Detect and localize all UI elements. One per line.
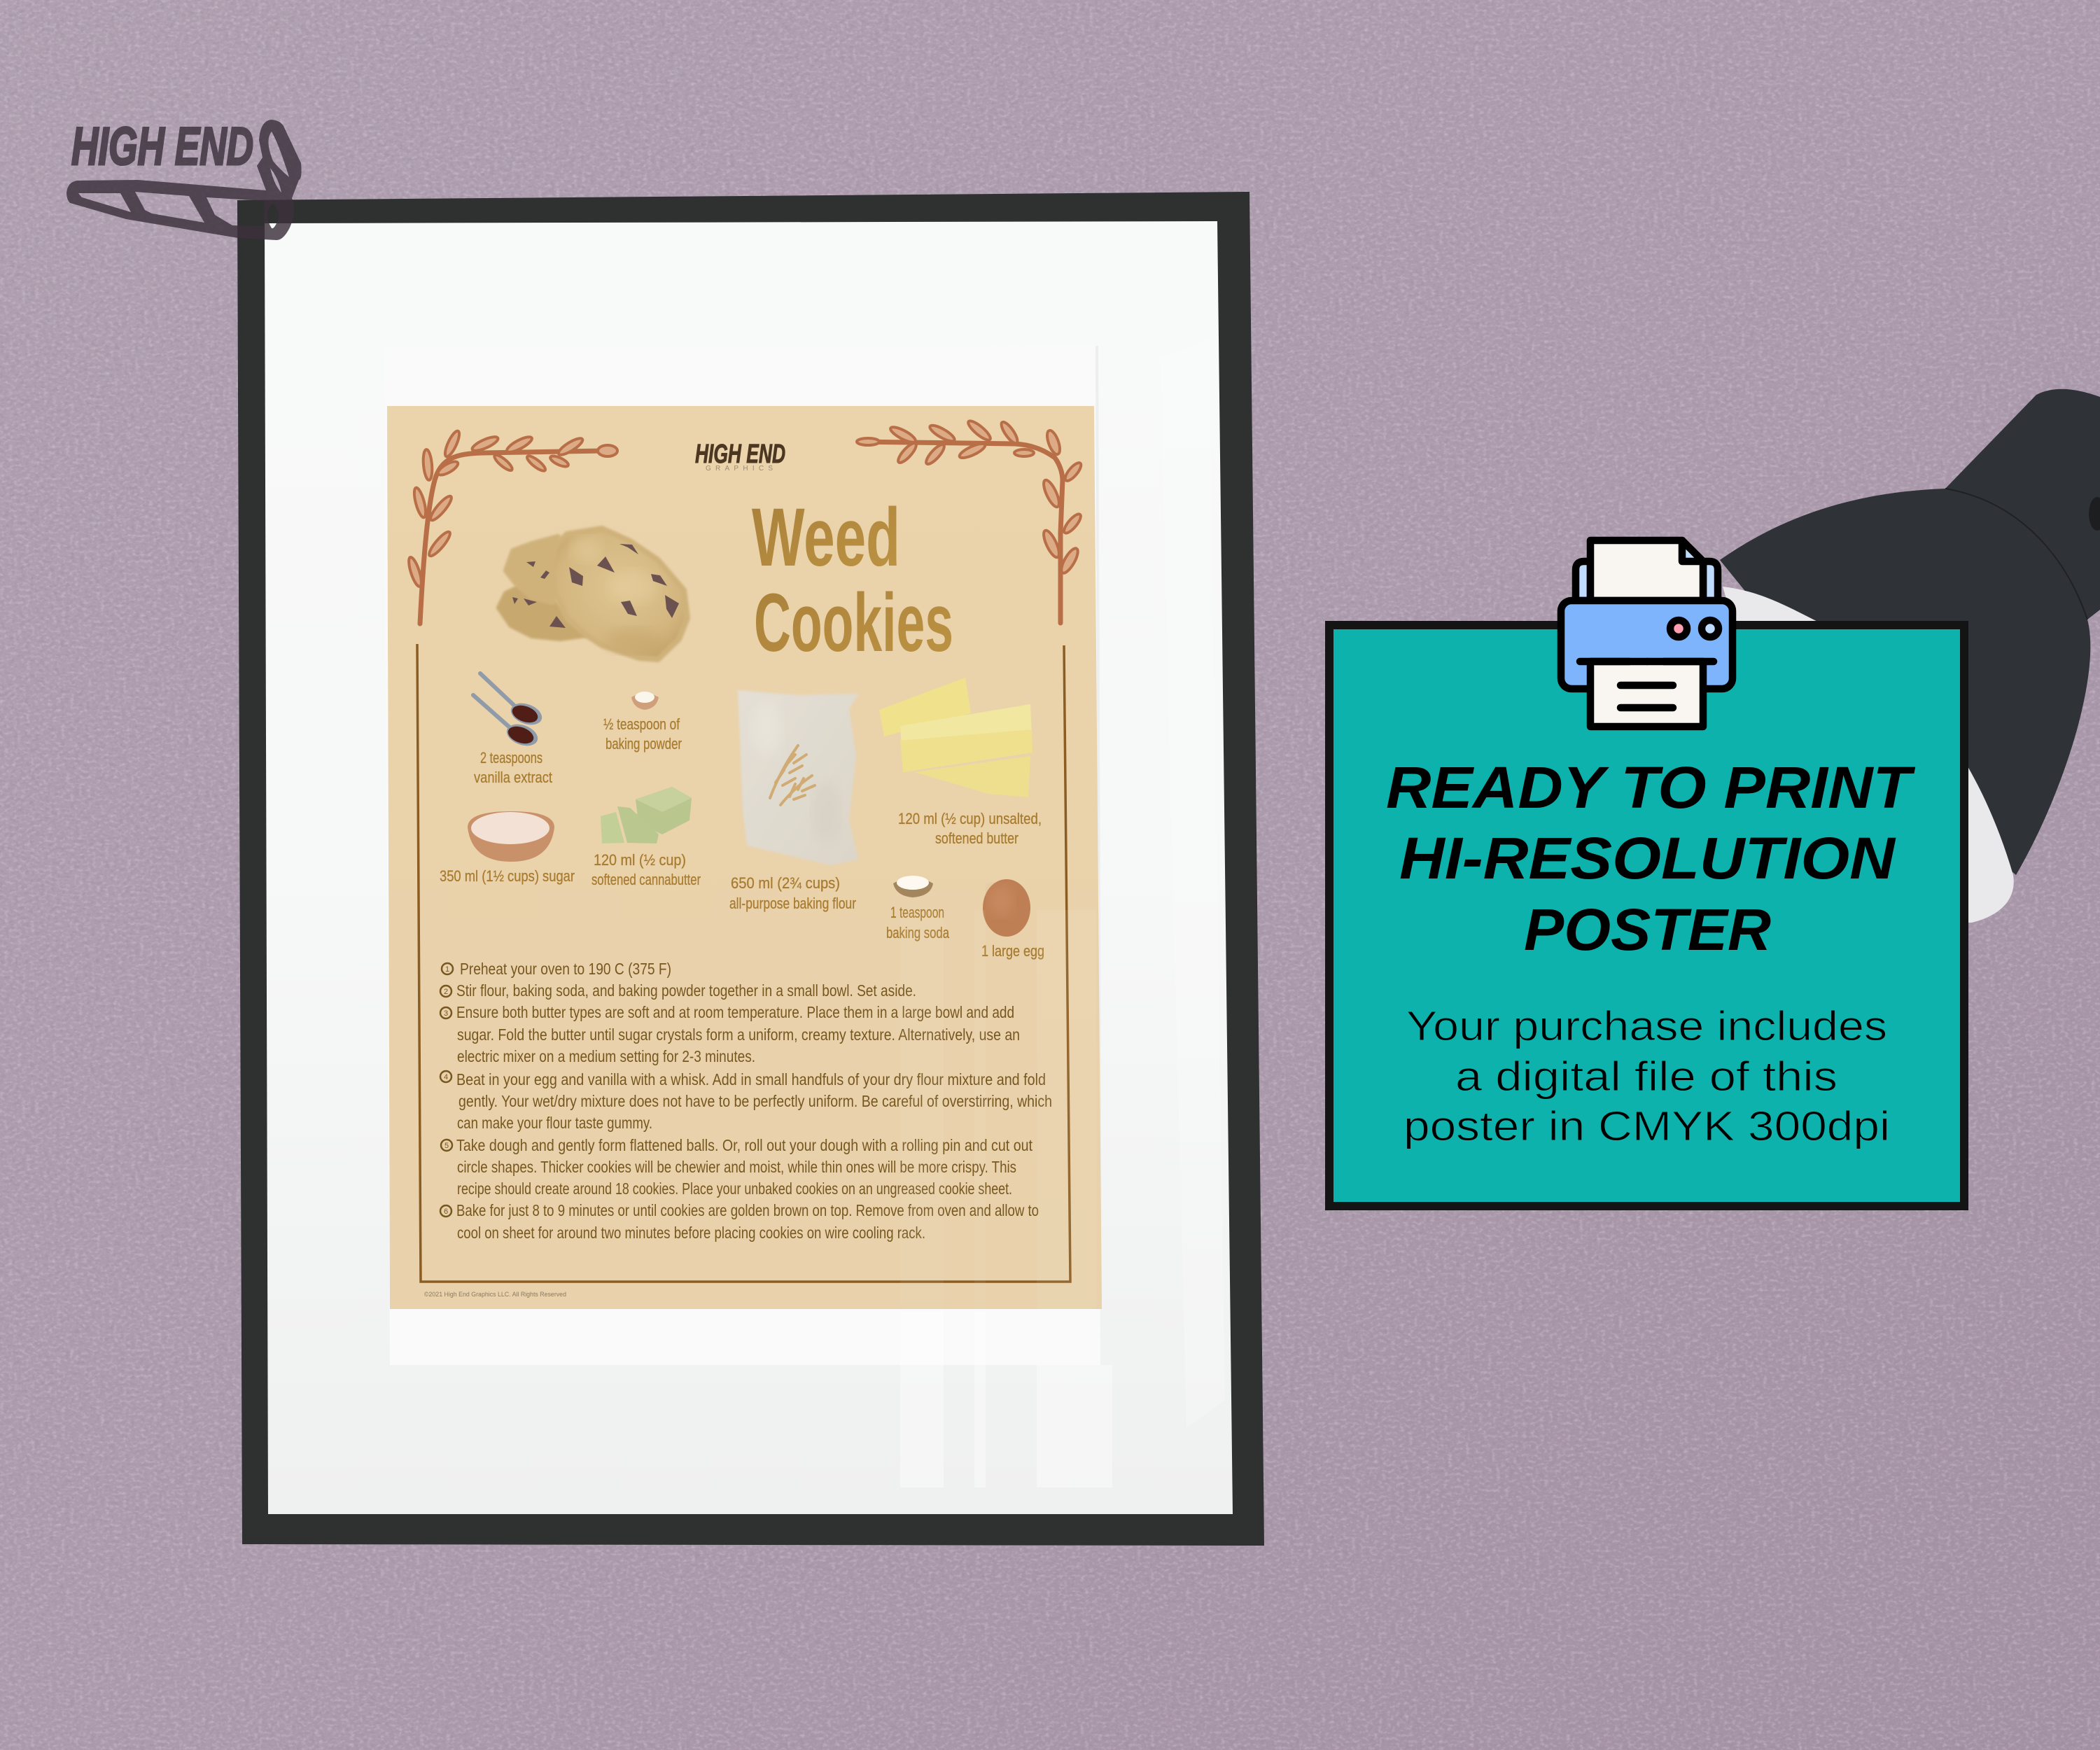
icon: printer (1561, 540, 1732, 727)
poster brand logo: HIGH END (695, 440, 785, 469)
ingredient: baking powder: ½ teaspoon of (603, 715, 680, 733)
glass reflections (900, 339, 1225, 1488)
recipe steps: Beat in your egg and vanilla with a whisk. Add in small handfuls of your dry flour mixture and fold (456, 1070, 1046, 1088)
picture frame (237, 192, 1264, 1546)
ingredient: baking soda: baking soda (886, 924, 950, 941)
poster sheet (384, 346, 1102, 1365)
panel heading: POSTER (1524, 897, 1771, 962)
step numbers (440, 963, 453, 1217)
recipe steps: sugar. Fold the butter until sugar crystals form a uniform, creamy texture. Alternatively, use an (457, 1026, 1020, 1044)
recipe steps: Preheat your oven to 190 C (375 F) (460, 960, 671, 978)
ingredient: sugar bowl: 350 ml (1½ cups) sugar (440, 867, 575, 885)
promo panel (1329, 625, 1964, 1206)
ingredient: sugar bowl (440, 811, 575, 885)
step numbers: 3 (444, 1009, 448, 1018)
panel heading (1386, 755, 1916, 962)
ingredient: cannabutter: softened cannabutter (592, 871, 701, 888)
recipe steps: Take dough and gently form flattened balls. Or, roll out your dough with a rolling pin and cut out (456, 1136, 1033, 1154)
recipe steps: electric mixer on a medium setting for 2-3 minutes. (457, 1047, 755, 1065)
step numbers: 6 (444, 1208, 448, 1216)
brand logo top left: HIGH END (71, 117, 253, 176)
surround edge shadow (1096, 346, 1102, 1309)
step numbers: 5 (444, 1142, 449, 1150)
recipe steps: Bake for just 8 to 9 minutes or until cookies are golden brown on top. Remove from oven and allow to (456, 1201, 1039, 1219)
ingredient: cannabutter (592, 787, 701, 888)
recipe steps: gently. Your wet/dry mixture does not have to be perfectly uniform. Be careful of overstirring, which (458, 1092, 1052, 1110)
recipe steps: Ensure both butter types are soft and at room temperature. Place them in a large bowl and add (456, 1003, 1014, 1021)
recipe steps: circle shapes. Thicker cookies will be chewier and moist, while thin ones will be more crispy. This (457, 1158, 1016, 1176)
poster beige paper (387, 406, 1102, 1309)
ingredient: butter sticks: 120 ml (½ cup) unsalted, (898, 810, 1042, 827)
recipe border lines (417, 644, 1070, 1282)
step numbers: 2 (444, 988, 448, 996)
ingredient: baking powder: baking powder (606, 735, 682, 752)
ingredient: flour bag: all-purpose baking flour (729, 895, 856, 912)
poster title: Weed (752, 491, 900, 584)
panel body text: a digital file of this (1455, 1054, 1837, 1100)
paper surround highlight (384, 346, 1100, 1365)
ingredient: vanilla extract spoons: vanilla extract (474, 769, 552, 786)
panel heading: READY TO PRINT (1386, 755, 1916, 820)
panel heading: HI-RESOLUTION (1399, 825, 1896, 891)
ingredient: baking soda (886, 876, 950, 941)
decorative branch top left (406, 429, 617, 624)
panel body text: Your purchase includes (1406, 1003, 1887, 1049)
white mat board (265, 221, 1233, 1514)
ingredient: flour bag (729, 690, 858, 912)
recipe steps: can make your flour taste gummy. (457, 1114, 652, 1132)
poster brand logo: GRAPHICS (706, 465, 773, 472)
ingredient: baking powder (603, 692, 682, 752)
recipe steps: cool on sheet for around two minutes before placing cookies on wire cooling rack. (457, 1224, 925, 1242)
poster title (752, 491, 953, 669)
copyright line: ©2021 High End Graphics LLC. All Rights Reserved (424, 1291, 566, 1298)
step numbers: 1 (445, 965, 449, 974)
ingredient: egg (981, 879, 1044, 960)
ingredient: flour bag: 650 ml (2¾ cups) (731, 874, 840, 892)
panel body text (1404, 1003, 1890, 1149)
ingredient: butter sticks (879, 678, 1042, 847)
joint icon (66, 120, 302, 240)
recipe steps: Stir flour, baking soda, and baking powder together in a small bowl. Set aside. (456, 981, 916, 1000)
ingredient: egg: 1 large egg (981, 942, 1044, 960)
illustration: chocolate chip cookies (499, 528, 687, 659)
ingredient: butter sticks: softened butter (935, 830, 1018, 847)
poster brand logo (695, 440, 785, 472)
step numbers: 4 (444, 1073, 448, 1082)
poster title: Cookies (754, 577, 953, 669)
brand logo top left (66, 117, 302, 240)
recipe steps (440, 960, 1052, 1242)
desk lamp (1720, 389, 2100, 923)
recipe steps: recipe should create around 18 cookies. Place your unbaked cookies on an ungreased cookie sheet. (457, 1180, 1012, 1198)
ingredient: vanilla extract spoons: 2 teaspoons (480, 749, 542, 766)
wheat emblem (770, 746, 815, 805)
panel body text: poster in CMYK 300dpi (1404, 1103, 1890, 1149)
ingredient: cannabutter: 120 ml (½ cup) (594, 851, 686, 869)
decorative branch top right (857, 419, 1084, 623)
ingredient: baking soda: 1 teaspoon (890, 904, 944, 921)
ingredient: vanilla extract spoons (473, 673, 552, 786)
